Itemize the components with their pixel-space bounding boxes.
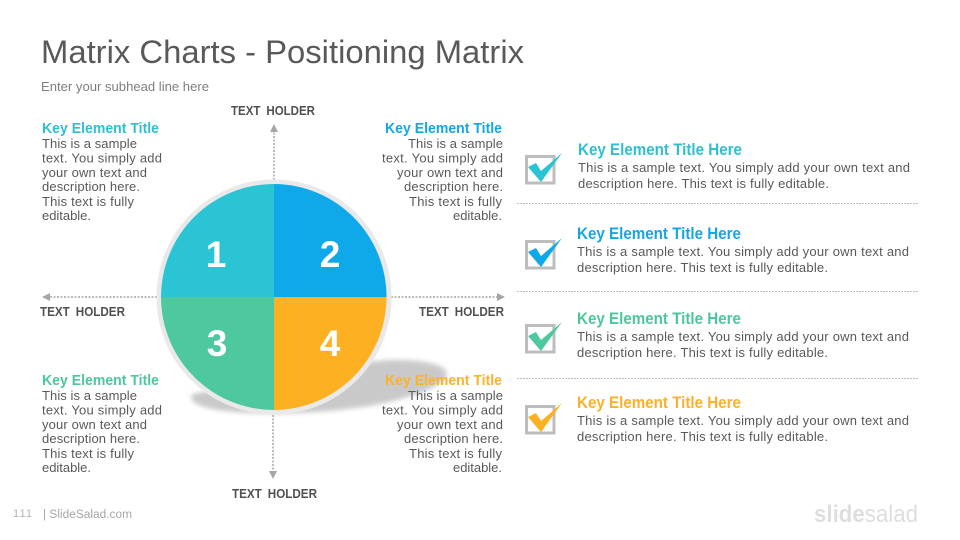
- body: This text is fully: [409, 446, 502, 461]
- arrow: down: [269, 415, 277, 479]
- body: This is a sample: [408, 388, 503, 403]
- arrow: right: [391, 293, 505, 301]
- quadrant 1: [161, 184, 274, 297]
- footer source: | SlideSalad.com: [43, 509, 132, 521]
- body: editable.: [453, 460, 502, 475]
- circle shadow: [191, 360, 447, 413]
- arrow: left: [42, 293, 157, 301]
- body: This text is fully: [409, 194, 502, 209]
- axis label: top: TEXT HOLDER: [231, 104, 315, 118]
- text block: top right: [382, 120, 503, 223]
- heading: Key Element Title: [385, 120, 502, 137]
- axis label: bottom: TEXT HOLDER: [232, 487, 317, 501]
- quadrant 3: [161, 297, 274, 410]
- number 2: 2: [320, 234, 340, 275]
- body: description here. This text is fully editable.: [577, 260, 828, 275]
- body: editable.: [42, 208, 91, 223]
- body: your own text and: [397, 165, 503, 180]
- number 3: 3: [207, 323, 227, 364]
- body: text. You simply add: [382, 150, 503, 166]
- body: your own text and: [42, 165, 147, 180]
- list item 2: [526, 225, 909, 275]
- body: This is a sample: [42, 388, 137, 403]
- quadrant 2: [274, 184, 386, 297]
- body: description here. This text is fully editable.: [577, 429, 828, 444]
- circle ring: [156, 180, 392, 414]
- body: This is a sample: [408, 136, 503, 151]
- matrix circle: [156, 180, 447, 414]
- heading: Key Element Title Here: [577, 310, 741, 328]
- list item 4: [526, 394, 909, 444]
- icon: checkbox teal: [526, 153, 562, 183]
- logo wordmark: slidesalad: [814, 501, 918, 528]
- body: description here. This text is fully editable.: [577, 345, 828, 360]
- page number: 111: [13, 508, 32, 520]
- heading: Key Element Title: [42, 372, 159, 389]
- subhead: Enter your subhead line here: [41, 80, 209, 94]
- text block: bottom right: [382, 372, 503, 475]
- heading: Key Element Title Here: [577, 225, 741, 243]
- list item 1: [526, 141, 910, 191]
- axis label: left: TEXT HOLDER: [40, 305, 125, 319]
- body: description here.: [404, 179, 503, 194]
- heading: Key Element Title: [385, 372, 502, 389]
- icon: checkbox amber: [526, 403, 562, 433]
- arrow: up: [270, 124, 278, 180]
- body: description here.: [42, 431, 140, 446]
- text block: top left: [42, 120, 162, 223]
- body: your own text and: [42, 417, 147, 432]
- body: text. You simply add: [382, 402, 503, 418]
- body: This is a sample text. You simply add your own text and: [577, 413, 909, 428]
- heading: Key Element Title Here: [578, 141, 742, 159]
- body: editable.: [453, 208, 502, 223]
- body: This text is fully: [42, 446, 134, 461]
- body: This is a sample text. You simply add your own text and: [577, 329, 909, 344]
- body: This text is fully: [42, 194, 134, 209]
- icon: checkbox green: [526, 322, 562, 352]
- list item 3: [526, 310, 909, 360]
- heading: Key Element Title Here: [577, 394, 741, 412]
- body: description here.: [42, 179, 140, 194]
- axis label: right: TEXT HOLDER: [419, 305, 504, 319]
- body: text. You simply add: [42, 402, 162, 418]
- number 1: 1: [206, 234, 226, 275]
- number 4: 4: [320, 323, 341, 364]
- body: This is a sample text. You simply add your own text and: [578, 160, 910, 175]
- body: This is a sample text. You simply add your own text and: [577, 244, 909, 259]
- quadrant 4: [274, 297, 386, 410]
- heading: Key Element Title: [42, 120, 159, 137]
- body: text. You simply add: [42, 150, 162, 166]
- body: editable.: [42, 460, 91, 475]
- body: This is a sample: [42, 136, 137, 151]
- text block: bottom left: [42, 372, 162, 475]
- body: description here.: [404, 431, 503, 446]
- body: your own text and: [397, 417, 503, 432]
- body: description here. This text is fully editable.: [578, 176, 829, 191]
- icon: checkbox blue: [526, 238, 562, 268]
- title: Matrix Charts - Positioning Matrix: [41, 34, 524, 70]
